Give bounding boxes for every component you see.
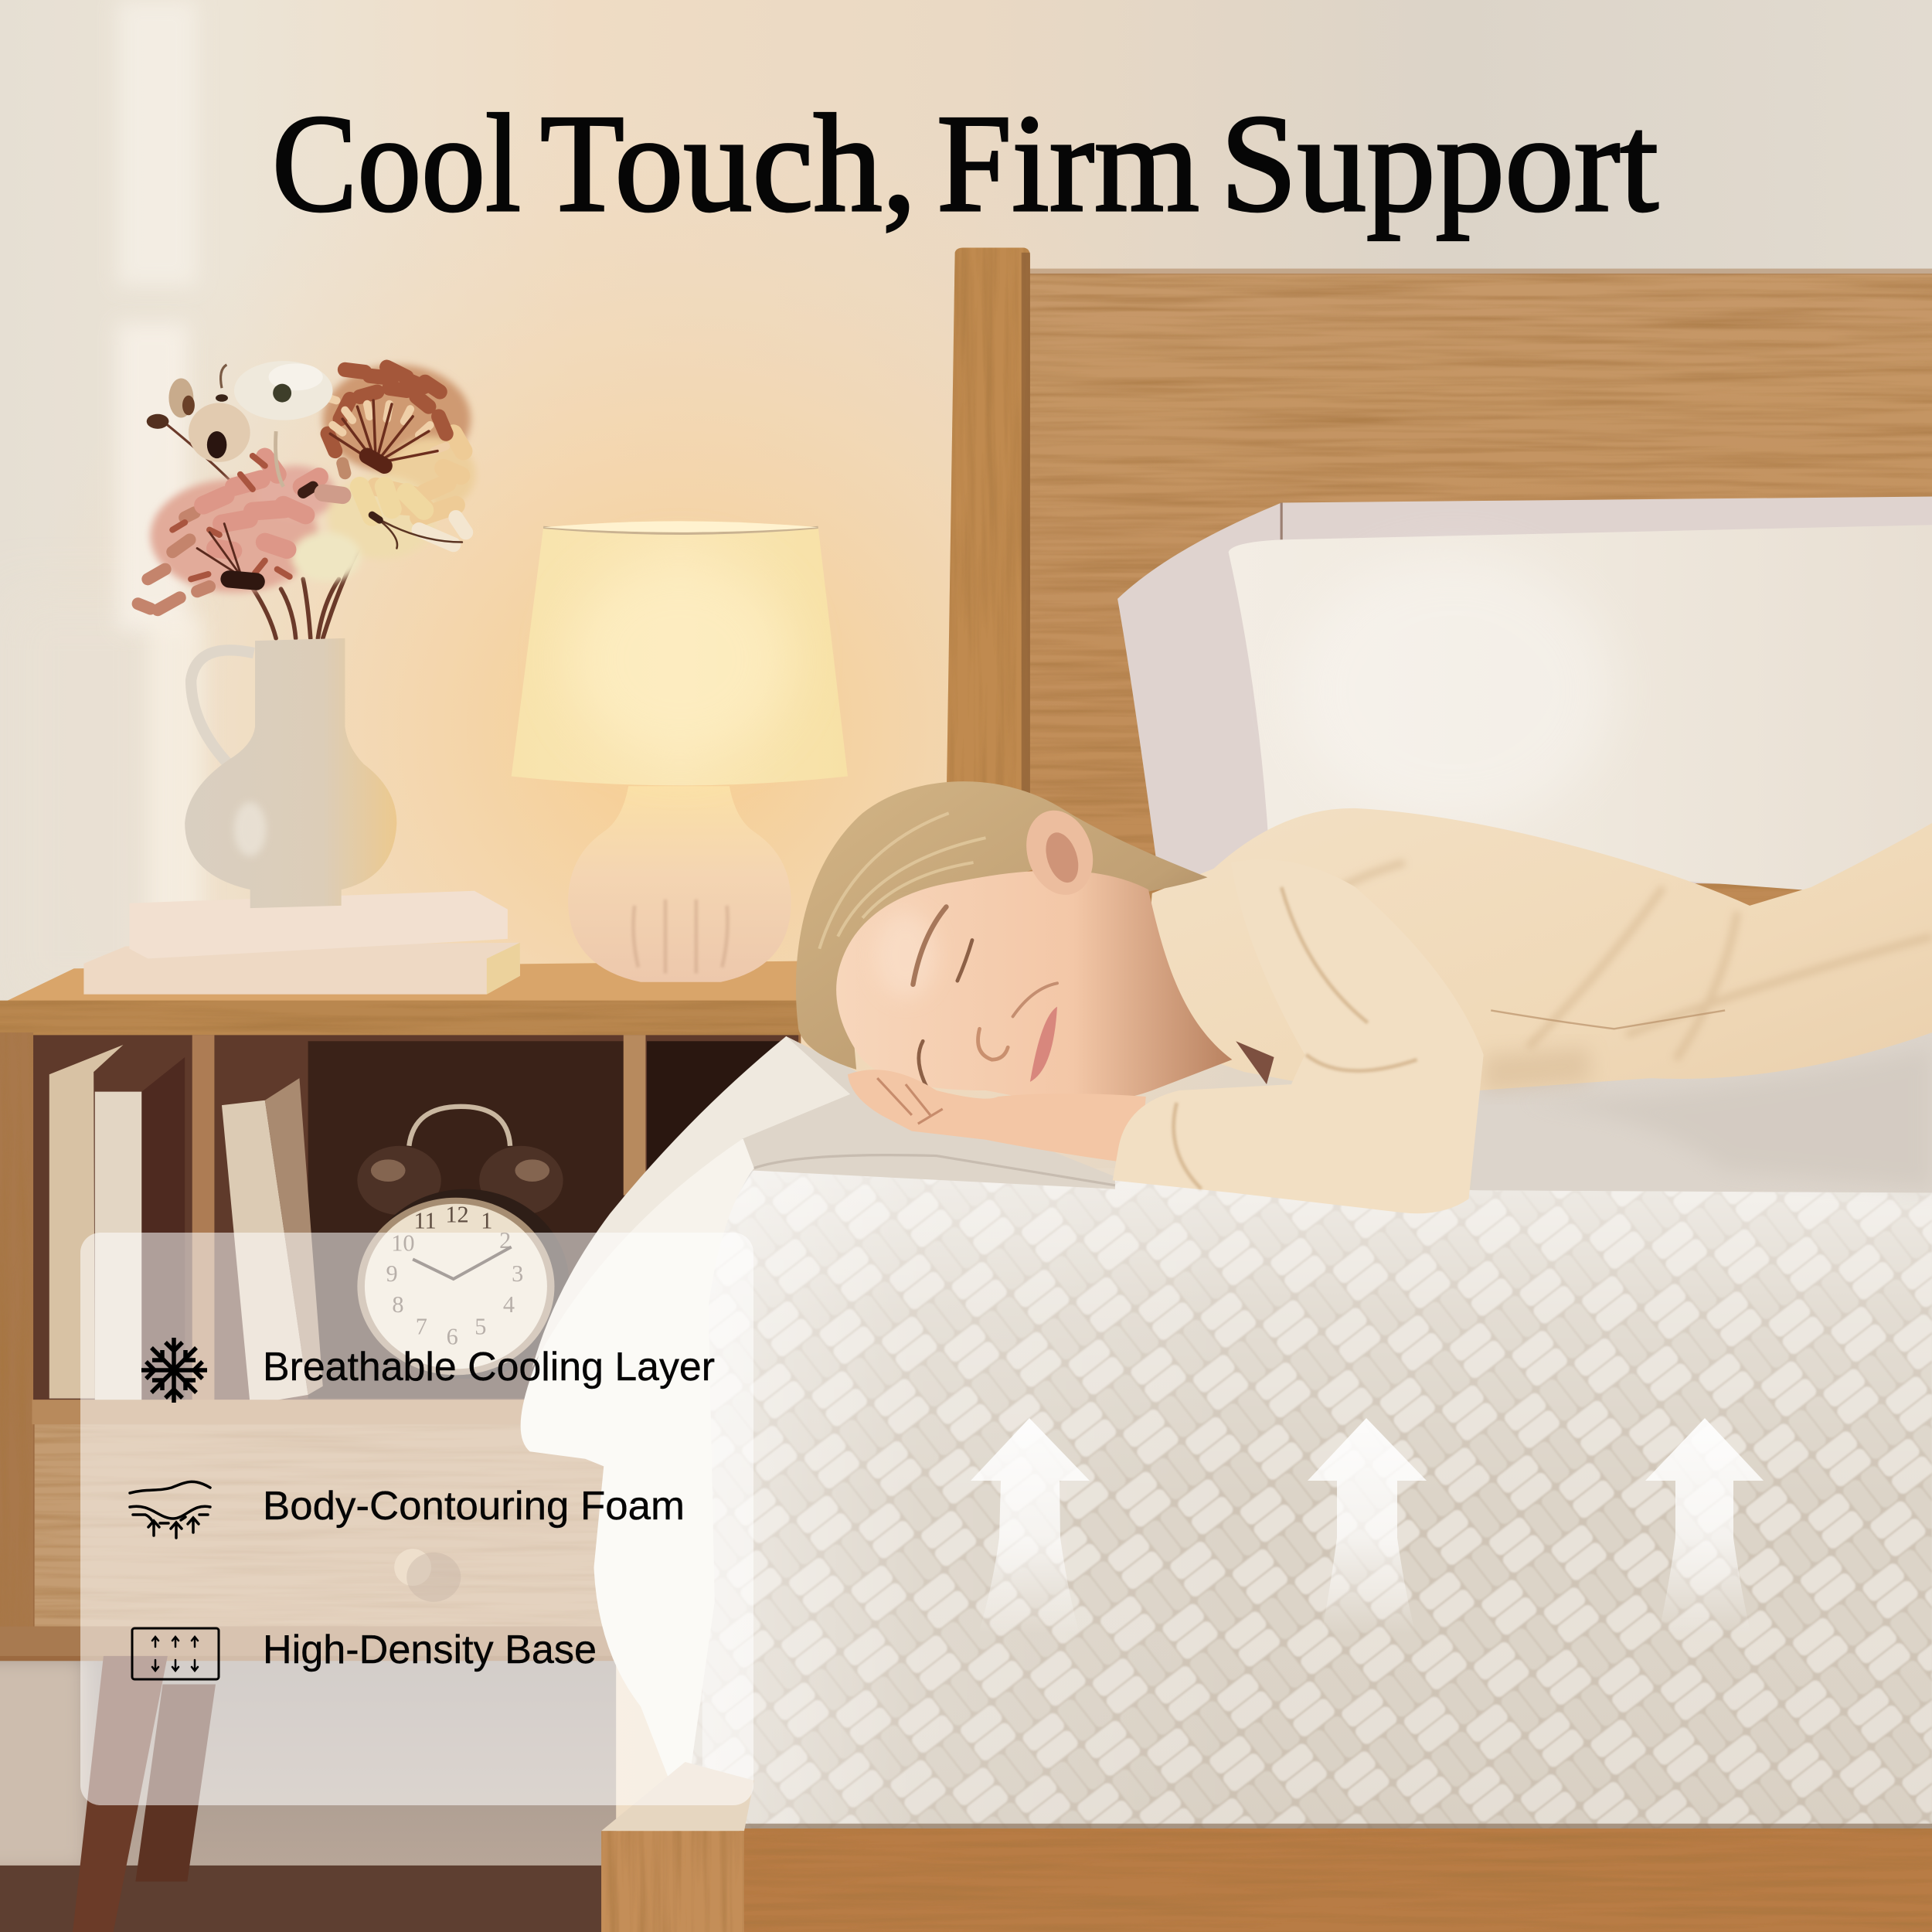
white poppy xyxy=(234,361,332,487)
flower stems xyxy=(168,425,373,638)
table lamp xyxy=(512,521,848,982)
hands xyxy=(848,1070,1146,1165)
floor and lower wall xyxy=(0,1657,616,1932)
vase xyxy=(185,638,396,908)
alarm clock: 10 xyxy=(391,1230,415,1256)
alarm clock: 8 xyxy=(392,1291,404,1318)
title: Firm xyxy=(937,87,1199,241)
alarm clock: 7 xyxy=(416,1314,427,1340)
nightstand xyxy=(0,961,801,1661)
mattress xyxy=(684,1168,1932,1831)
top surface xyxy=(0,961,801,1004)
hair xyxy=(796,781,1208,1070)
title: Support xyxy=(1220,87,1658,241)
sweater sleeve xyxy=(1113,859,1484,1213)
title xyxy=(272,87,1658,241)
icon: contouring foam xyxy=(130,1481,210,1538)
airflow arrows xyxy=(971,1418,1764,1634)
headboard xyxy=(946,247,1932,914)
stacked books xyxy=(83,891,520,995)
alarm clock: 3 xyxy=(512,1260,523,1287)
title: Cool xyxy=(272,87,521,241)
alarm clock: 2 xyxy=(499,1227,511,1253)
icon: high-density base xyxy=(132,1628,219,1679)
alarm clock: 11 xyxy=(413,1208,437,1234)
feature label: cooling: Breathable Cooling Layer xyxy=(263,1345,715,1389)
shelf books xyxy=(49,1045,123,1399)
pillows xyxy=(1117,497,1932,900)
feature label: foam: Body-Contouring Foam xyxy=(263,1484,685,1529)
nightstand legs xyxy=(73,1656,216,1932)
icon: snowflake xyxy=(141,1338,207,1403)
pink flower xyxy=(138,456,342,610)
alarm clock: 6 xyxy=(447,1323,458,1349)
title: Touch, xyxy=(540,87,917,241)
white blanket drape xyxy=(521,1036,1115,1811)
flower colour masses xyxy=(151,365,475,593)
alarm clock: 5 xyxy=(474,1314,486,1340)
gray blanket over body xyxy=(1472,1032,1932,1192)
alarm clock: 4 xyxy=(503,1291,515,1318)
neck and face xyxy=(836,870,1232,1103)
feature label: base: High-Density Base xyxy=(263,1628,597,1672)
cream flower xyxy=(342,463,466,549)
alarm clock: 1 xyxy=(481,1208,492,1234)
beige poppy and bud xyxy=(147,365,250,462)
rust flower xyxy=(324,367,463,518)
sleeping woman xyxy=(796,781,1932,1213)
flowers xyxy=(138,361,475,638)
shelf and drawer xyxy=(32,1400,624,1424)
alarm clock: 12 xyxy=(445,1202,469,1228)
bed frame xyxy=(601,1762,1932,1932)
alarm clock xyxy=(357,1107,570,1379)
alarm clock: 9 xyxy=(386,1260,398,1287)
sweater body xyxy=(1151,808,1932,1109)
frosted feature panel xyxy=(80,1233,753,1805)
